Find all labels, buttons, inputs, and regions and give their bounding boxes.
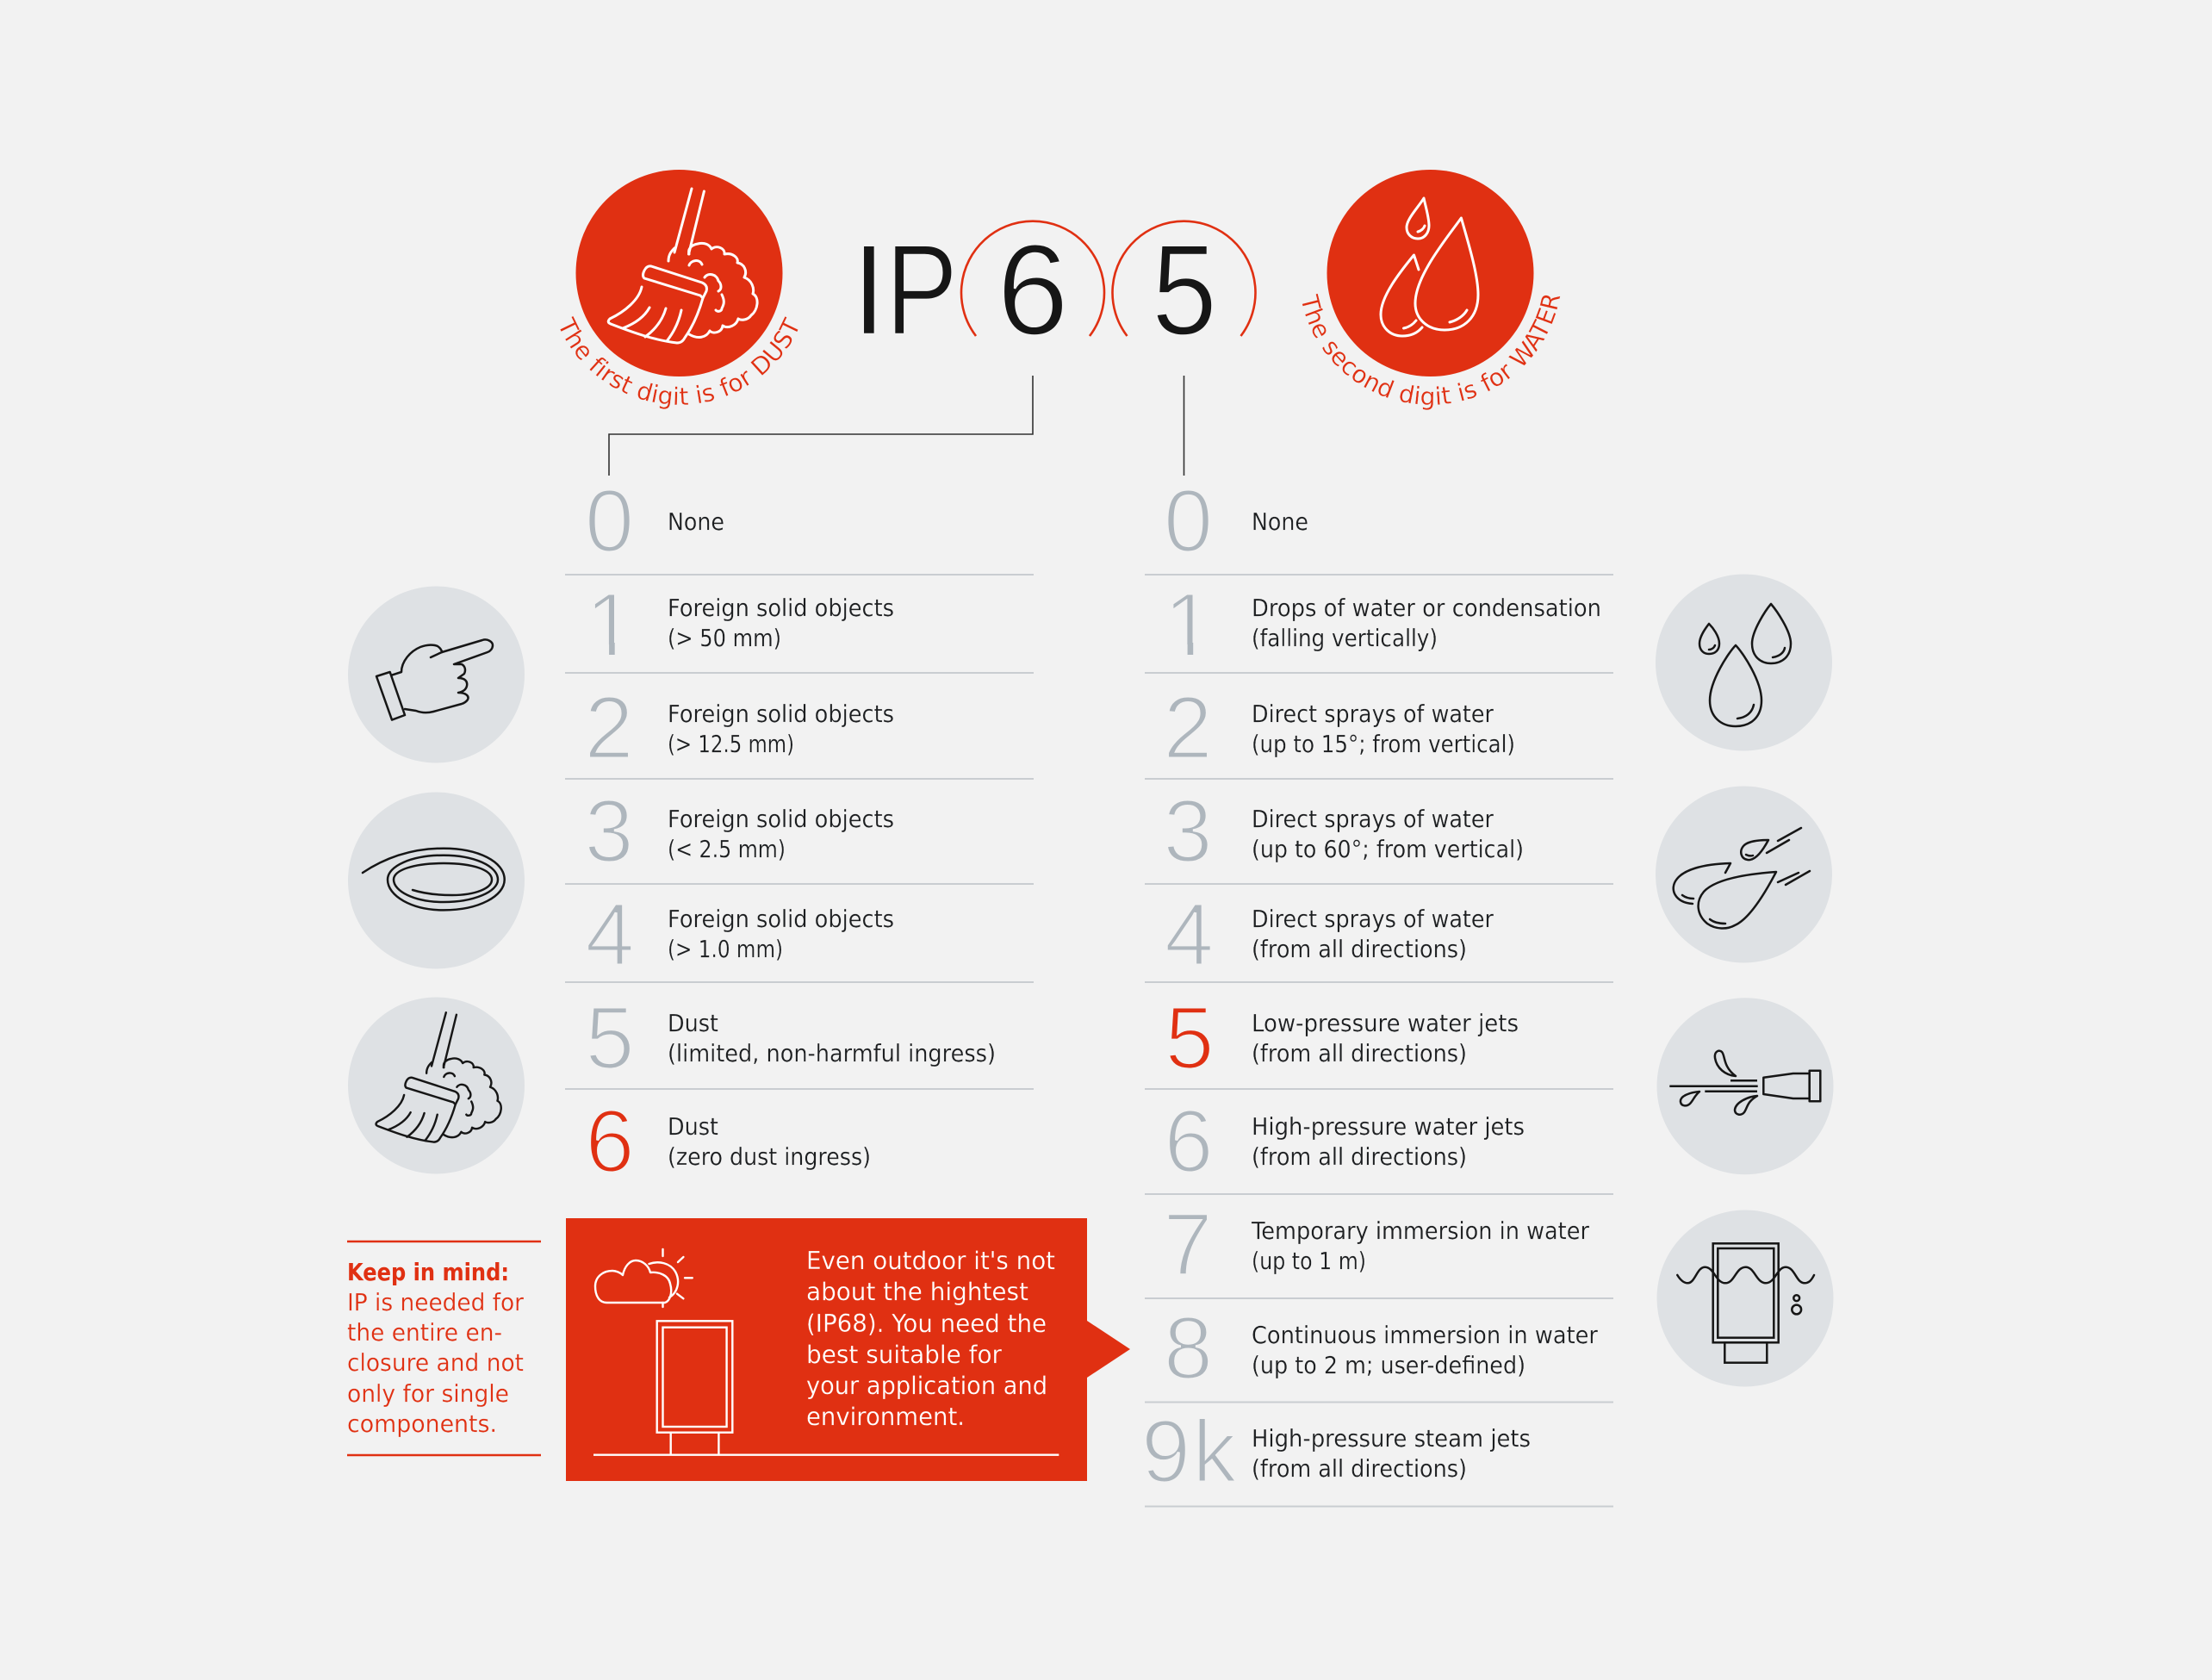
first digit 6 with arc — [961, 217, 1104, 362]
row 8: (up to 2 m; user-defined) — [1252, 1352, 1525, 1379]
row 2: Foreign solid objects — [668, 700, 894, 728]
row 4 — [1165, 885, 1494, 984]
row 1: 1 — [586, 575, 635, 674]
row 4: Direct sprays of water — [1252, 905, 1494, 933]
row 6, highlighted — [585, 1092, 871, 1191]
panel text: about the hightest — [806, 1278, 1028, 1306]
row 7: (up to 1 m) — [1252, 1248, 1366, 1275]
row 2: 2 — [1163, 678, 1213, 777]
row 1 — [1163, 575, 1601, 674]
icon: cloud and sun — [595, 1249, 693, 1307]
second digit 5 with arc: 5 — [1152, 217, 1217, 362]
callout: keep in mind — [347, 1241, 541, 1455]
row 8 — [1164, 1298, 1599, 1397]
badge: dust — [560, 170, 798, 409]
row 6: High-pressure water jets — [1252, 1113, 1525, 1141]
icon: broom and dust — [348, 998, 525, 1173]
row 2: (> 12.5 mm) — [668, 731, 794, 758]
row 0: 0 — [585, 471, 634, 570]
row 3: (up to 60°; from vertical) — [1252, 836, 1524, 863]
title letters IP: I — [851, 217, 887, 362]
icon: broom and dust, white — [608, 189, 757, 343]
row 6, highlighted: (zero dust ingress) — [668, 1143, 871, 1171]
row 9k: High-pressure steam jets — [1252, 1425, 1531, 1453]
row 4: Foreign solid objects — [668, 905, 894, 933]
panel text: (IP68). You need the — [806, 1310, 1047, 1338]
second digit 5 with arc — [1112, 217, 1255, 362]
row 2 — [1163, 678, 1515, 777]
row 5, highlighted: 5 — [1165, 988, 1215, 1087]
title letters IP: P — [885, 217, 958, 362]
title letters IP — [851, 217, 958, 362]
row 3: Foreign solid objects — [668, 806, 894, 833]
callout: keep in mind: IP is needed for — [347, 1288, 524, 1316]
icon: water drops, white — [1381, 198, 1478, 336]
panel text — [806, 1247, 1055, 1431]
title: IP65 — [851, 217, 1255, 362]
row 2 — [584, 678, 894, 777]
icon: falling drops — [1656, 574, 1832, 751]
row 0 — [1164, 471, 1308, 570]
icon: wire coil — [348, 793, 525, 968]
row 9k: (from all directions) — [1252, 1455, 1467, 1483]
panel text: your application and — [806, 1372, 1047, 1400]
panel text: best suitable for — [806, 1341, 1002, 1369]
callout: keep in mind: Keep in mind: — [347, 1258, 509, 1286]
row 6: (from all directions) — [1252, 1143, 1467, 1171]
row 6: 6 — [1164, 1092, 1214, 1191]
row 5: 5 — [585, 988, 635, 1087]
row 0: 0 — [1164, 471, 1213, 570]
row 6, highlighted: Dust — [668, 1113, 718, 1141]
row 3 — [584, 781, 894, 880]
row 3: (< 2.5 mm) — [668, 836, 786, 863]
caption on arc: second digit: The second digit is for WATER — [1302, 293, 1561, 410]
table: water ratings — [1141, 471, 1613, 1506]
row 5, highlighted — [1165, 988, 1519, 1087]
row 0: None — [668, 508, 724, 536]
row 3: 3 — [584, 781, 634, 880]
first digit 6 with arc: 6 — [997, 217, 1069, 362]
icon: water jet nozzle — [1657, 998, 1833, 1174]
row 6 — [1164, 1092, 1525, 1191]
row 0: None — [1252, 508, 1308, 536]
row 3: 3 — [1163, 781, 1213, 880]
connector: first digit to dust table — [609, 376, 1033, 476]
row 4: 4 — [1165, 885, 1214, 984]
connector: second digit to water table — [1184, 376, 1185, 476]
row 8: Continuous immersion in water — [1252, 1322, 1599, 1349]
row 7: 7 — [1163, 1195, 1213, 1294]
row 4: (from all directions) — [1252, 936, 1467, 963]
row 4: (> 1.0 mm) — [668, 936, 783, 963]
caption on arc: first digit: The first digit is for DUST — [560, 315, 798, 409]
row 2: 2 — [584, 678, 634, 777]
badge: water — [1302, 170, 1561, 410]
row 7: Temporary immersion in water — [1251, 1217, 1590, 1245]
row 5, highlighted: Low-pressure water jets — [1252, 1010, 1519, 1037]
callout: keep in mind: components. — [347, 1409, 497, 1438]
row 1: Drops of water or condensation — [1252, 594, 1601, 622]
row 5, highlighted: (from all directions) — [1252, 1040, 1467, 1067]
row 2: (up to 15°; from vertical) — [1252, 731, 1515, 758]
row 8: 8 — [1164, 1298, 1213, 1397]
row 1: 1 — [1164, 575, 1213, 674]
row 2: Direct sprays of water — [1252, 700, 1494, 728]
table: dust ratings — [565, 471, 1034, 1191]
row 5 — [585, 988, 996, 1087]
row 1: Foreign solid objects — [668, 594, 894, 622]
row 6, highlighted: 6 — [585, 1092, 635, 1191]
panel text: Even outdoor it's not — [806, 1247, 1055, 1275]
callout: keep in mind: the entire en- — [347, 1318, 502, 1347]
row 9k — [1141, 1402, 1531, 1501]
row 4 — [585, 885, 894, 984]
row 4: 4 — [585, 885, 635, 984]
row 3: Direct sprays of water — [1252, 806, 1494, 833]
callout: keep in mind: closure and not — [347, 1348, 524, 1377]
icon: enclosure on stand — [593, 1321, 1059, 1455]
row 9k: 9k — [1141, 1402, 1237, 1501]
row 1 — [586, 575, 894, 674]
callout: outdoor advice panel — [566, 1218, 1130, 1481]
row 1: (falling vertically) — [1252, 625, 1438, 652]
icon: immersed enclosure — [1657, 1210, 1833, 1387]
icon: direct sprays — [1656, 786, 1832, 963]
row 7 — [1163, 1195, 1590, 1294]
callout: keep in mind: only for single — [347, 1379, 509, 1408]
row 5: Dust — [668, 1010, 718, 1037]
row 1: (> 50 mm) — [668, 625, 781, 652]
row 0 — [585, 471, 724, 570]
panel text: environment. — [806, 1403, 965, 1431]
row 5: (limited, non-harmful ingress) — [668, 1040, 996, 1067]
row 3 — [1163, 781, 1524, 880]
icon: pointing hand — [348, 586, 525, 763]
